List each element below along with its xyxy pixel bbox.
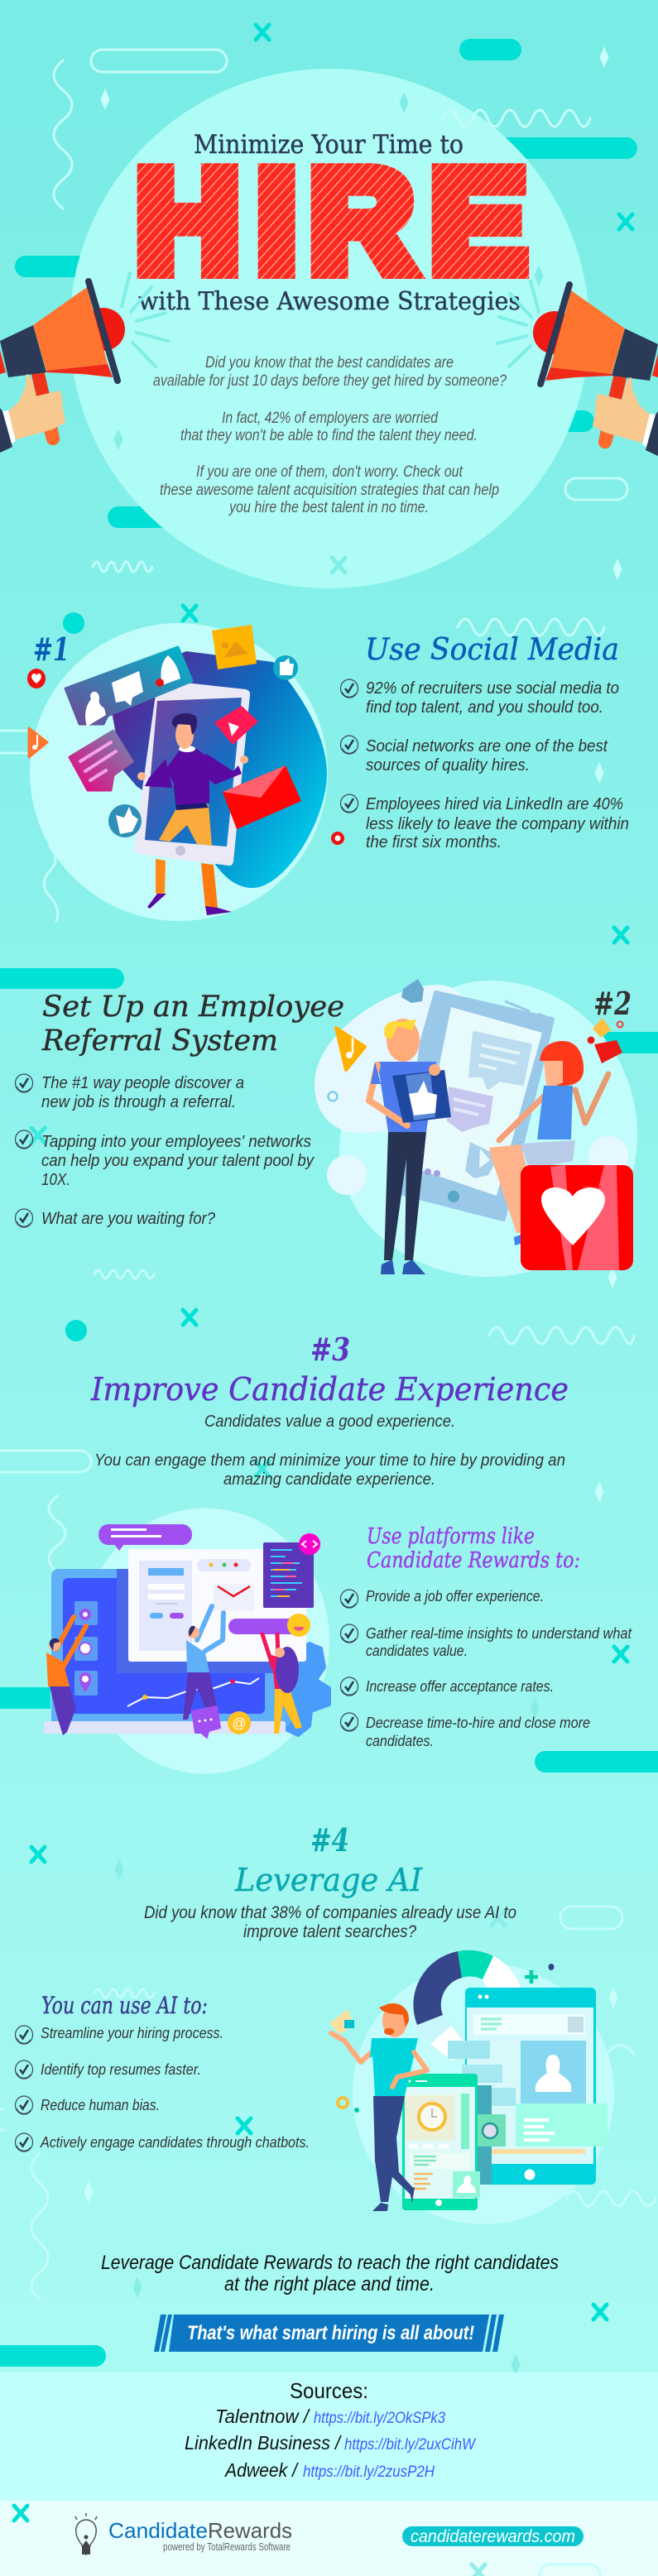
heading: employee referral: Referral System bbox=[41, 1024, 278, 1058]
title line 1: Minimize Your Time to bbox=[194, 130, 463, 160]
bullet list: 10X. bbox=[41, 1171, 70, 1189]
code panel bbox=[263, 1533, 320, 1608]
bullet list: sources of quality hires. bbox=[366, 756, 530, 775]
hero circle bbox=[70, 69, 589, 588]
icon: right megaphone bbox=[533, 285, 658, 456]
app icons bbox=[74, 1601, 98, 1696]
icon: plus bbox=[525, 1970, 538, 1984]
speech bubble bbox=[98, 1524, 192, 1551]
subheading: You can use AI to: bbox=[41, 1992, 208, 2019]
banner bbox=[154, 2315, 504, 2352]
bullet list: What are you waiting for? bbox=[41, 1210, 216, 1228]
illustration: referral bbox=[315, 979, 637, 1277]
man bbox=[369, 1019, 451, 1274]
source 3: https://bit.ly/2zusP2H bbox=[303, 2463, 435, 2481]
intro text: available for just 10 days before they get hired by someone? bbox=[153, 372, 507, 390]
intro text bbox=[144, 1903, 516, 1941]
source 1: https://bit.ly/2OkSPk3 bbox=[314, 2410, 445, 2427]
person right bbox=[262, 1634, 302, 1734]
bullet list bbox=[341, 679, 629, 851]
number 2: #2 bbox=[593, 985, 632, 1022]
logo wordmark: Rewards bbox=[208, 2518, 292, 2543]
heading: candidate experience: Improve Candidate Experience bbox=[90, 1371, 569, 1408]
panel: header bbox=[0, 25, 658, 621]
icon: music note bbox=[29, 728, 47, 757]
intro text: you hire the best talent in no time. bbox=[228, 499, 429, 516]
intro text: If you are one of them, don't worry. Check out bbox=[196, 463, 463, 481]
intro text: In fact, 42% of employers are worried bbox=[222, 410, 439, 427]
decorative dots bbox=[338, 1964, 555, 2113]
person middle bbox=[183, 1606, 223, 1720]
source 3: Adweek / bbox=[223, 2459, 299, 2481]
icon: play video bbox=[214, 706, 258, 745]
panel: strategy 1 bbox=[0, 612, 629, 943]
bullet list: can help you expand your talent pool by bbox=[41, 1152, 315, 1170]
closing text: Leverage Candidate Rewards to reach the right candidates bbox=[101, 2252, 559, 2274]
illustration: AI bbox=[329, 1950, 614, 2224]
icon: large thumbs up bbox=[108, 804, 142, 837]
bullet list bbox=[15, 2025, 310, 2151]
closing text: at the right place and time. bbox=[224, 2273, 435, 2295]
subheading bbox=[367, 1524, 580, 1573]
icon: left megaphone bbox=[0, 281, 125, 453]
line chart bbox=[127, 1678, 259, 1706]
heading: employee referral bbox=[41, 991, 344, 1058]
source 2 bbox=[185, 2432, 477, 2454]
bullet list: Identify top resumes faster. bbox=[41, 2061, 201, 2078]
icon: envelopes and heart bbox=[588, 1018, 622, 1063]
number 4: #4 bbox=[310, 1821, 349, 1859]
intro text: You can engage them and minimize your time to hire by providing an bbox=[94, 1451, 565, 1470]
person left bbox=[46, 1617, 86, 1735]
bullet list: the first six months. bbox=[366, 833, 502, 851]
panel: sources bbox=[0, 2372, 658, 2501]
number 1: #1 bbox=[33, 631, 70, 668]
intro text: Candidates value a good experience. bbox=[204, 1413, 455, 1431]
source 3 bbox=[223, 2459, 435, 2481]
title line 2: with These Awesome Strategies bbox=[138, 287, 521, 316]
panel: closing bbox=[0, 2252, 607, 2376]
bullet list: Streamline your hiring process. bbox=[41, 2025, 223, 2041]
banner: That's what smart hiring is all about! bbox=[187, 2322, 474, 2344]
heading: leverage AI: Leverage AI bbox=[234, 1862, 423, 1898]
bullet list: candidates value. bbox=[366, 1643, 468, 1659]
subheading: Candidate Rewards to: bbox=[367, 1548, 580, 1573]
sources heading: Sources: bbox=[290, 2378, 368, 2403]
icon: envelope bbox=[223, 765, 301, 829]
bullet list: Tapping into your employees' networks bbox=[41, 1133, 311, 1151]
logo wordmark bbox=[108, 2518, 292, 2553]
title: HIRE: HIRE bbox=[136, 140, 526, 301]
bullet list bbox=[15, 1074, 315, 1228]
bullet list: Decrease time-to-hire and close more bbox=[366, 1715, 590, 1731]
icon: thumbs up bbox=[273, 655, 298, 680]
bullet list: find top talent, and you should too. bbox=[366, 698, 603, 717]
number 3: #3 bbox=[310, 1331, 350, 1368]
source 1 bbox=[215, 2406, 445, 2427]
bullet list: candidates. bbox=[366, 1733, 434, 1749]
intro text: improve talent searches? bbox=[243, 1922, 416, 1941]
bullet list: Employees hired via LinkedIn are 40% bbox=[366, 795, 623, 813]
icon: music triangle bbox=[336, 1028, 365, 1070]
source 2: LinkedIn Business / bbox=[185, 2432, 342, 2454]
heading: employee referral: Set Up an Employee bbox=[42, 991, 344, 1024]
intro text: that they won't be able to find the talent they need. bbox=[180, 427, 478, 444]
panel: strategy 2 bbox=[0, 968, 658, 1288]
subheading: Use platforms like bbox=[367, 1524, 535, 1549]
icon: gift heart box bbox=[521, 1165, 633, 1270]
panel: strategy 4 bbox=[0, 1821, 656, 2299]
icon: at sign: @ bbox=[232, 1715, 247, 1731]
icon: at sign bbox=[228, 1711, 251, 1734]
phone bbox=[402, 2074, 480, 2210]
woman bbox=[489, 1041, 608, 1245]
closing text bbox=[101, 2252, 559, 2295]
intro text bbox=[94, 1413, 565, 1489]
intro text bbox=[153, 354, 507, 516]
intro text: Did you know that the best candidates are bbox=[205, 354, 454, 372]
icon: envelope bbox=[214, 1584, 254, 1610]
bullet list: new job is through a referral. bbox=[41, 1093, 236, 1111]
illustration: platform bbox=[44, 1508, 329, 1774]
bullet list bbox=[341, 1588, 632, 1749]
logo wordmark: powered by TotalRewards Software bbox=[163, 2540, 291, 2553]
man bbox=[329, 2003, 427, 2211]
source 1: Talentnow / bbox=[215, 2406, 311, 2427]
smile bar bbox=[228, 1614, 310, 1637]
source 2: https://bit.ly/2uxCihW bbox=[344, 2436, 477, 2454]
intro text: amazing candidate experience. bbox=[223, 1470, 435, 1489]
icon: heart badge bbox=[27, 669, 46, 688]
bullet list: Gather real-time insights to understand what bbox=[366, 1625, 632, 1642]
logo wordmark: Candidate bbox=[108, 2518, 208, 2543]
bullet list: Social networks are one of the best bbox=[366, 737, 608, 756]
bullet list: The #1 way people discover a bbox=[41, 1074, 244, 1092]
panel: strategy 3 bbox=[0, 1310, 658, 1774]
heading: use social media: Use Social Media bbox=[365, 633, 619, 667]
illustration: social media bbox=[27, 623, 344, 921]
panel: footer bbox=[0, 2501, 658, 2576]
icon: logo bulb bbox=[75, 2513, 97, 2554]
icon: pink chat bbox=[70, 731, 132, 790]
intro text: Did you know that 38% of companies already use AI to bbox=[144, 1903, 516, 1922]
bullet list: Increase offer acceptance rates. bbox=[366, 1678, 554, 1695]
bullet list: Provide a job offer experience. bbox=[366, 1588, 544, 1605]
bullet list: Actively engage candidates through chatbots. bbox=[40, 2134, 310, 2151]
sound lines bbox=[122, 273, 539, 367]
website button: candidaterewards.com bbox=[411, 2527, 575, 2546]
icon: image card bbox=[212, 625, 257, 669]
icon: notification bubble bbox=[65, 647, 192, 727]
bullet list: 92% of recruiters use social media to bbox=[366, 679, 619, 698]
intro text: these awesome talent acquisition strategies that can help bbox=[160, 482, 499, 499]
bullet list: Reduce human bias. bbox=[41, 2097, 160, 2113]
icon: small heart bbox=[331, 832, 344, 845]
icon: chat bbox=[192, 1706, 220, 1738]
bullet list: less likely to leave the company within bbox=[366, 815, 629, 833]
